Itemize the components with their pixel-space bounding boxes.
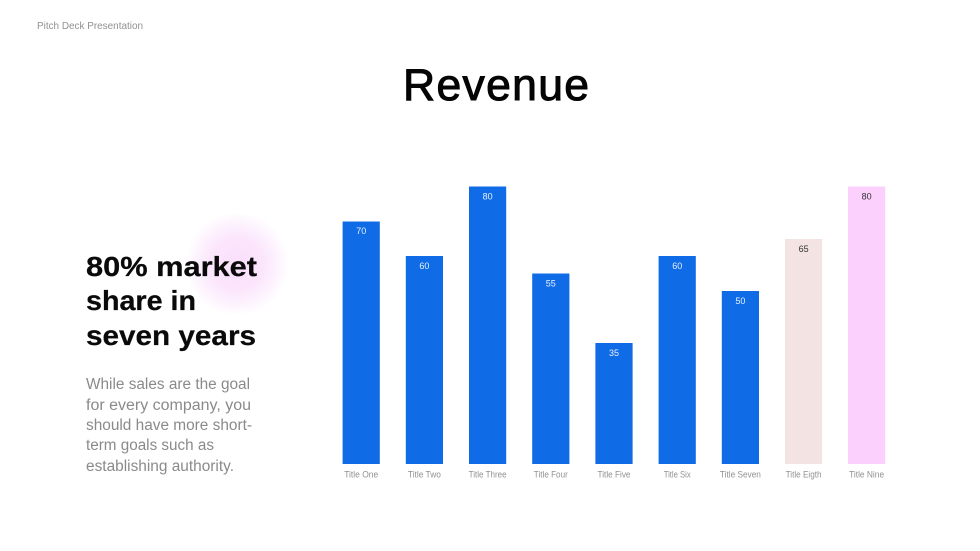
- heading: seven years: [86, 320, 256, 351]
- bar: Title Four: [532, 274, 569, 480]
- bar: Title Five: Title Five: [598, 470, 630, 480]
- bar: Title Two: 60: [419, 261, 429, 271]
- bar: Title Eigth: Title Eigth: [786, 470, 822, 480]
- bar: Title One: [343, 222, 380, 480]
- bar: Title Seven: 50: [735, 296, 745, 306]
- deck label: Pitch Deck Presentation: [37, 21, 143, 32]
- bar: Title Six: Title Six: [664, 470, 691, 480]
- title: Revenue: [403, 61, 589, 110]
- bar: Title Eigth: 65: [799, 244, 809, 254]
- bar: Title Three: 80: [483, 192, 493, 202]
- heading: share in: [86, 285, 196, 316]
- bar: Title Five: 35: [609, 348, 619, 358]
- bar: Title Six: 60: [672, 261, 682, 271]
- bar: Title Nine: Title Nine: [849, 470, 884, 480]
- pink glow: [185, 212, 289, 316]
- bar: Title Six: [659, 256, 696, 480]
- bar: Title Four: 55: [546, 278, 556, 288]
- bar: Title Three: [469, 186, 507, 480]
- body text: term goals such as: [86, 437, 214, 454]
- bar: Title Seven: Title Seven: [720, 470, 761, 480]
- body text: should have more short-: [86, 417, 252, 434]
- bar: Title Eigth: [785, 239, 822, 480]
- bar: Title Seven: [720, 291, 761, 480]
- bar: Title One: Title One: [344, 470, 378, 480]
- body text: While sales are the goal: [86, 376, 250, 393]
- bar: Title Two: Title Two: [408, 470, 441, 480]
- bar: Title Four: Title Four: [534, 470, 568, 480]
- bar: Title One: 70: [356, 226, 366, 236]
- heading: 80% market: [86, 251, 257, 282]
- bar chart: [343, 186, 885, 480]
- bar: Title Three: Title Three: [469, 470, 507, 480]
- body text: for every company, you: [86, 397, 251, 414]
- body text: [86, 376, 252, 475]
- heading: [86, 251, 257, 351]
- bar: Title Five: [595, 343, 633, 480]
- body text: establishing authority.: [86, 458, 234, 475]
- bar: Title Nine: [848, 186, 885, 480]
- bar: Title Nine: 80: [862, 192, 872, 202]
- bar: Title Two: [406, 256, 443, 480]
